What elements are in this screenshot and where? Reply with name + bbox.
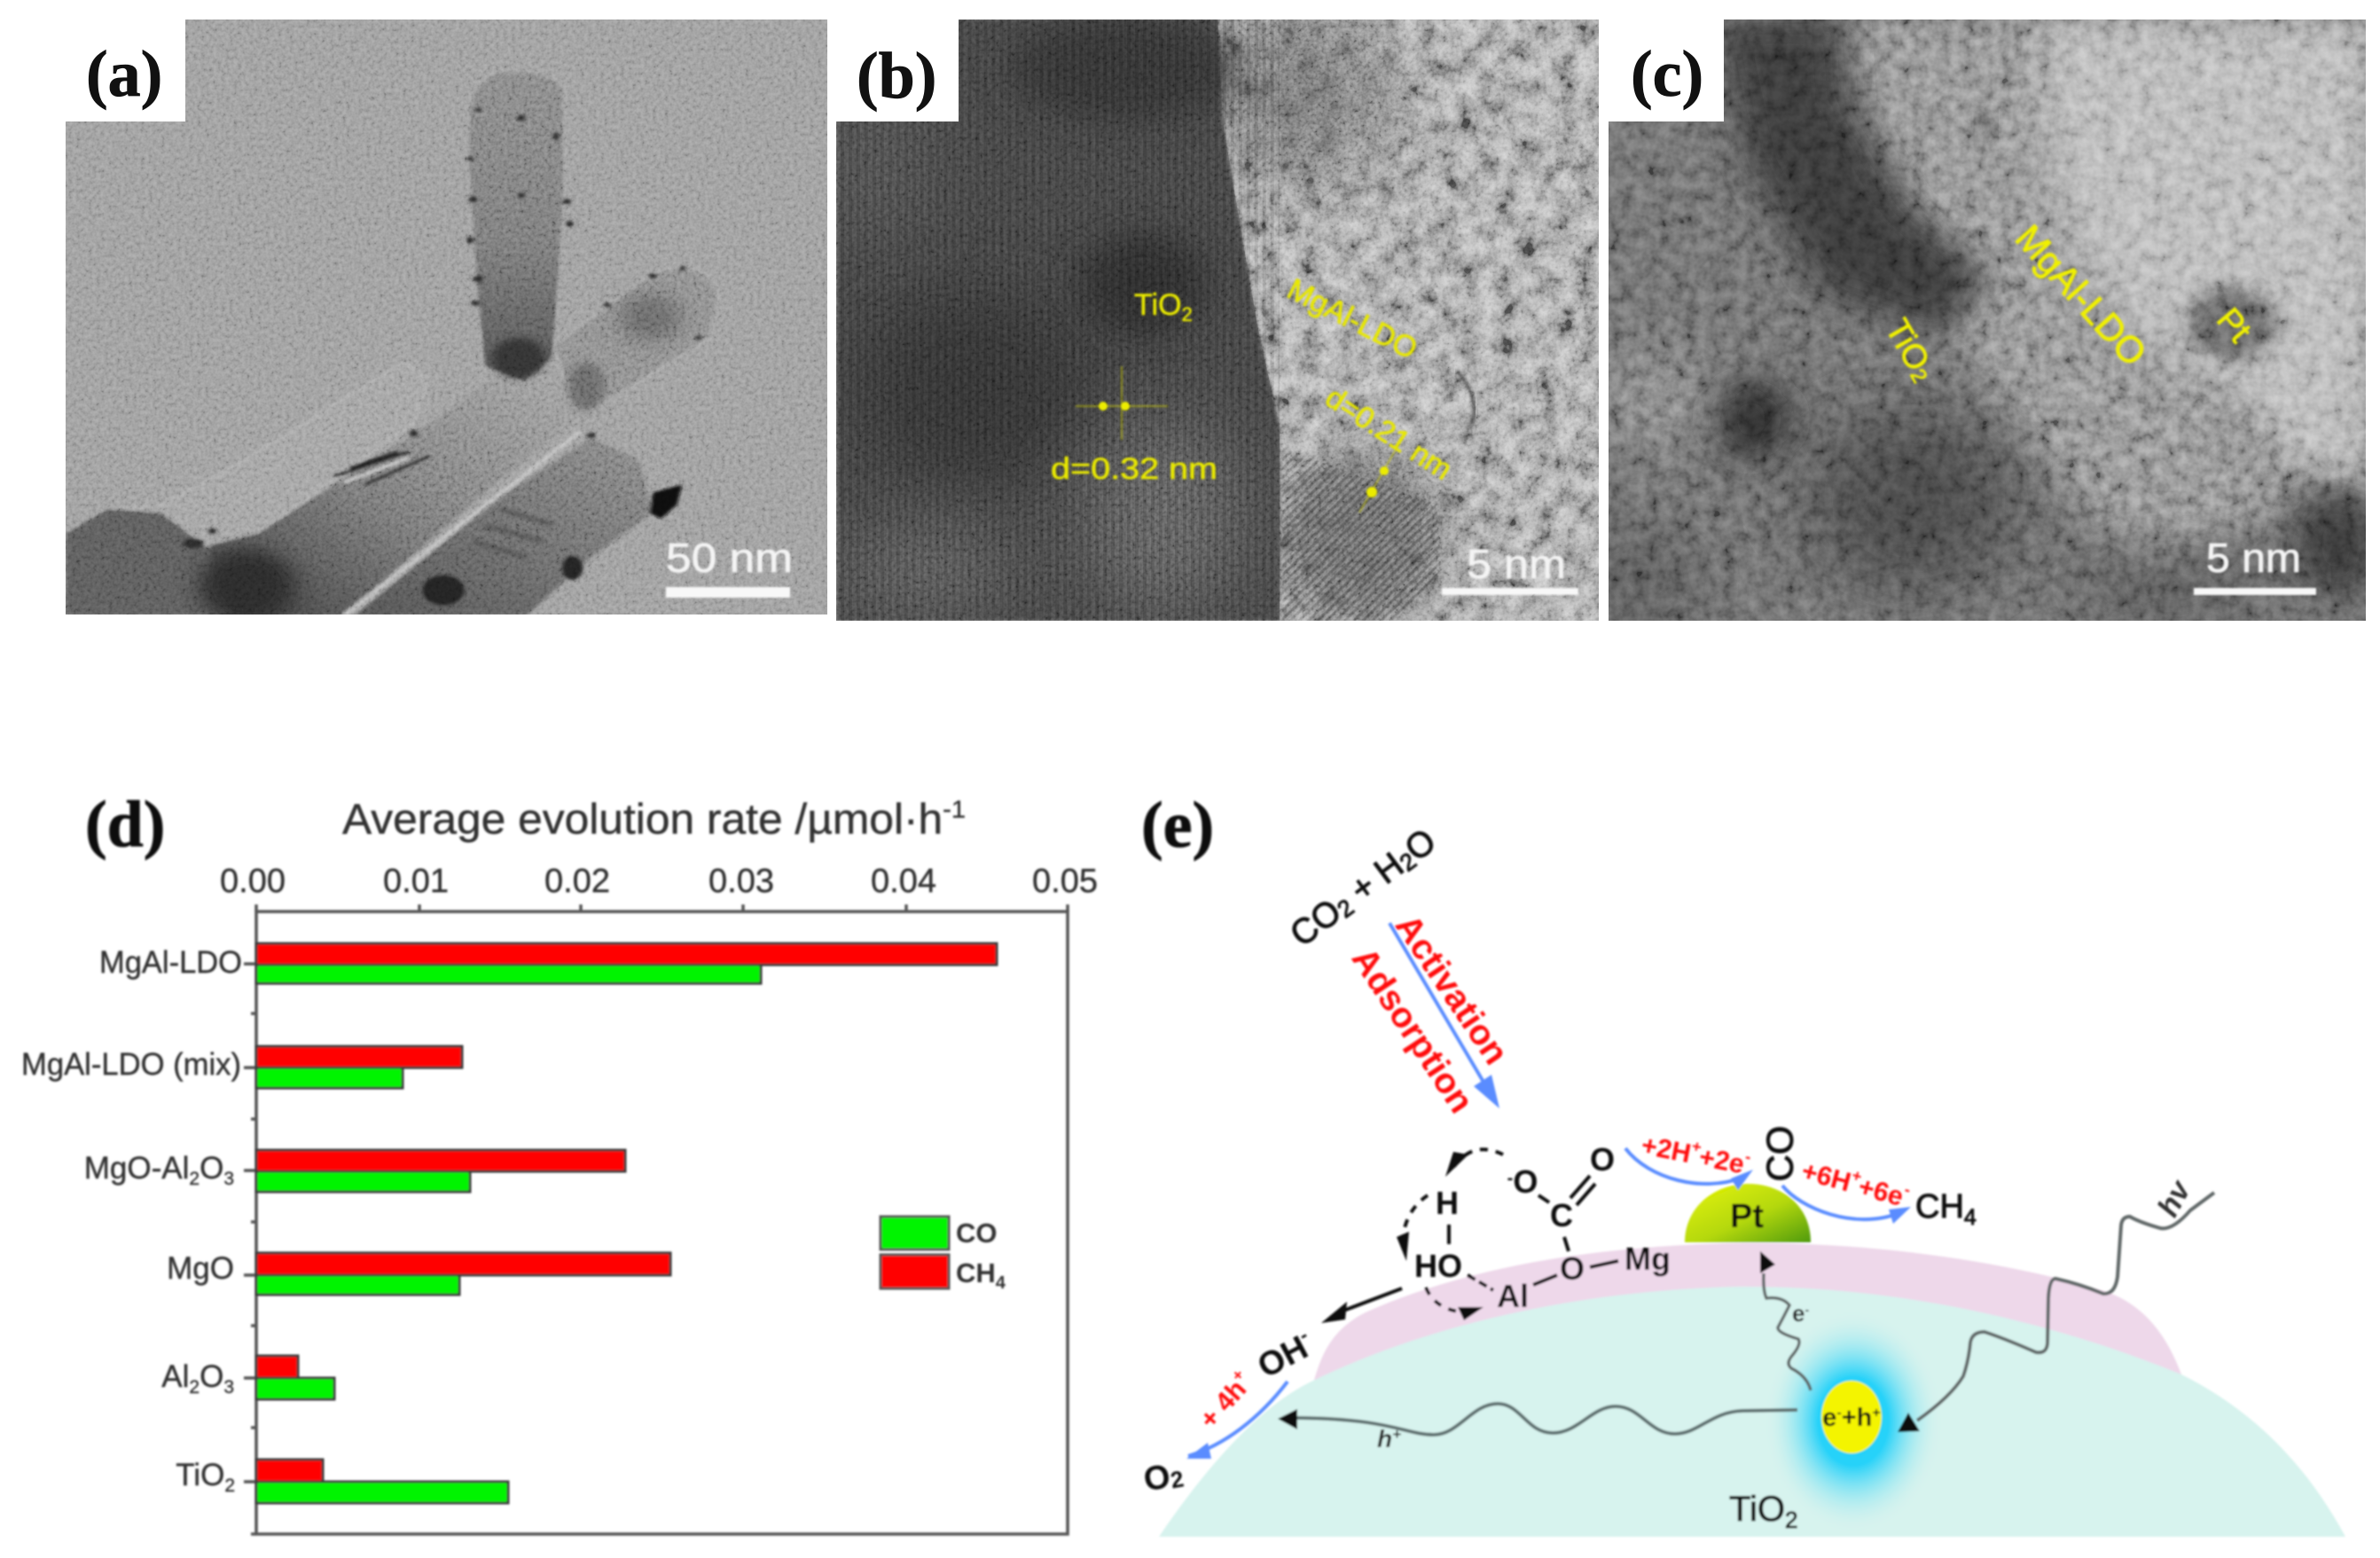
y axis category labels xyxy=(21,945,242,1496)
red label +2H+ +2e-: - xyxy=(1744,1147,1752,1166)
red label +2H+ +2e-: + xyxy=(1690,1137,1703,1156)
red label +6H+ +6e-: + xyxy=(1850,1166,1864,1186)
series: CH4 bars xyxy=(256,943,997,1482)
TiO2 teal body xyxy=(1159,1287,2345,1537)
blue arrow: CO2 to CO xyxy=(1625,1148,1753,1190)
OH- label: OH xyxy=(1252,1329,1314,1386)
wavy arrow: hole: h xyxy=(1377,1425,1392,1452)
yellow annotations: d=0.32 nm xyxy=(1051,452,1217,486)
surface chemistry structure: Mg xyxy=(1625,1241,1671,1277)
reactants text CO2 + H2O: 2 xyxy=(1333,894,1358,923)
red label +6H+ +6e-: +6e xyxy=(1855,1171,1906,1211)
arrow: hydroxyl release xyxy=(1321,1288,1402,1323)
y axis category labels: MgAl-LDO (mix) xyxy=(21,1047,241,1082)
axis title: Average evolution rate /µmol·h xyxy=(342,796,922,843)
surface chemistry structure: C xyxy=(1550,1197,1573,1233)
x axis tick labels: 0.05 xyxy=(1032,863,1098,900)
electron-hole pair: +h xyxy=(1842,1404,1872,1432)
panel: (a) TEM image of nanorods xyxy=(66,20,827,622)
yellow annotations: MgAl-LDO xyxy=(1282,272,1422,366)
label (d): (d) xyxy=(85,788,165,861)
legend: 4 xyxy=(996,1273,1006,1293)
panel: (e) reaction mechanism schematic xyxy=(1141,789,2345,1537)
label (b): (b) xyxy=(857,40,936,113)
plot frame and ticks xyxy=(244,904,1068,1534)
y axis category labels: Al xyxy=(161,1359,189,1394)
y axis category labels: 3 xyxy=(223,1377,234,1398)
legend: CO xyxy=(956,1217,997,1249)
electron-hole pair: e xyxy=(1822,1404,1836,1432)
red label +2H+ +2e-: +2H xyxy=(1639,1131,1693,1169)
Pt particle: Pt xyxy=(1730,1198,1764,1235)
scale bar 5 nm: 5 nm xyxy=(1467,541,1566,587)
scale bar 5 nm xyxy=(1442,541,1578,595)
electron-hole pair xyxy=(1821,1381,1882,1453)
surface chemistry structure: HO xyxy=(1414,1248,1462,1284)
O2 label: O xyxy=(1141,1458,1173,1499)
surface chemistry structure xyxy=(1397,1141,1671,1320)
red label +2H+ +2e-: +2e xyxy=(1697,1142,1747,1179)
yellow annotations: 2 xyxy=(1906,364,1932,387)
y axis category labels: 3 xyxy=(223,1169,234,1189)
white label box (c) xyxy=(1609,20,1724,121)
scale bar 5 nm xyxy=(2194,535,2316,595)
surface chemistry structure: H xyxy=(1436,1185,1459,1221)
x axis tick labels: 0.00 xyxy=(220,863,286,900)
wavy arrow: hole: + xyxy=(1392,1426,1401,1443)
x axis tick labels: 0.03 xyxy=(709,863,774,900)
blue arrow: CO to CH4 xyxy=(1782,1186,1911,1224)
panel: (c) HRTEM with Pt particle xyxy=(1586,20,2380,627)
y axis category labels: O xyxy=(200,1359,223,1394)
scale bar 50 nm xyxy=(666,535,793,598)
red label Activation: Activation xyxy=(1388,908,1515,1071)
surface chemistry structure: - xyxy=(1507,1169,1513,1188)
surface chemistry structure: O xyxy=(1590,1141,1615,1178)
x axis tick labels: 0.04 xyxy=(871,863,936,900)
label (a): (a) xyxy=(86,38,162,111)
electron-hole pair: + xyxy=(1872,1405,1881,1421)
label (e): (e) xyxy=(1141,789,1214,862)
legend: CH xyxy=(956,1257,996,1288)
surface chemistry structure: O xyxy=(1513,1163,1538,1200)
red label Adsorption: Adsorption xyxy=(1344,941,1481,1120)
yellow annotations: 2 xyxy=(1182,303,1193,325)
y axis category labels: 2 xyxy=(189,1169,200,1189)
OH- label: - xyxy=(1295,1323,1311,1346)
red label +6H+ +6e-: +6H xyxy=(1798,1156,1854,1197)
white label box (b) xyxy=(836,20,959,121)
reactants text CO2 + H2O: + H xyxy=(1335,845,1411,915)
yellow annotations: TiO xyxy=(1878,313,1937,378)
CO label: CO xyxy=(1759,1126,1800,1181)
label (c): (c) xyxy=(1631,38,1703,111)
surface chemistry structure: Al xyxy=(1497,1278,1529,1314)
blue arrow: adsorption and activation xyxy=(1390,923,1499,1108)
y axis category labels: MgAl-LDO xyxy=(99,945,242,980)
axis title: -1 xyxy=(943,795,966,823)
reactants text CO2 + H2O: CO xyxy=(1283,891,1349,954)
red label +4h+: + 4h xyxy=(1194,1374,1252,1435)
wavy arrow: electron xyxy=(1760,1251,1811,1390)
x axis tick labels xyxy=(220,863,1098,900)
y axis category labels: 2 xyxy=(224,1476,235,1496)
exciton glow xyxy=(1765,1311,1942,1532)
y axis category labels: MgO xyxy=(167,1251,234,1286)
TiO2 label: 2 xyxy=(1785,1507,1797,1533)
reactants text CO2 + H2O: 2 xyxy=(1395,848,1421,877)
white label box (a) xyxy=(66,20,185,121)
surface chemistry structure: O xyxy=(1560,1250,1585,1287)
wavy arrow: incident light hv xyxy=(1898,1174,2214,1432)
CH4 label: CH xyxy=(1915,1188,1964,1225)
y axis category labels: 2 xyxy=(189,1377,200,1398)
scale bar 5 nm: 5 nm xyxy=(2206,535,2301,581)
MgAl-LDO pink layer xyxy=(1314,1243,2181,1419)
TiO2 label: TiO xyxy=(1729,1490,1785,1529)
series: CO bars xyxy=(256,965,761,1503)
x axis tick labels: 0.02 xyxy=(544,863,610,900)
scale bar 50 nm: 50 nm xyxy=(666,535,793,581)
O2 label: 2 xyxy=(1169,1465,1186,1493)
yellow annotations xyxy=(1878,216,2259,388)
y axis category labels: TiO xyxy=(176,1458,224,1492)
wavy arrow: electron: e xyxy=(1792,1300,1805,1327)
wavy arrow: electron: - xyxy=(1805,1303,1809,1317)
yellow annotations: Pt xyxy=(2209,301,2259,350)
blue arrow to O2 xyxy=(1186,1382,1288,1459)
reactants text CO2 + H2O: O xyxy=(1398,821,1443,869)
y axis category labels: MgO-Al xyxy=(84,1151,189,1186)
CH4 label: 4 xyxy=(1964,1205,1977,1230)
yellow annotations: TiO xyxy=(1134,288,1182,322)
wavy arrow: hole xyxy=(1278,1404,1797,1452)
panel: (b) HRTEM lattice image xyxy=(830,0,1599,627)
Pt particle xyxy=(1685,1184,1811,1242)
x axis tick labels: 0.01 xyxy=(383,863,449,900)
yellow annotations xyxy=(1051,272,1458,513)
yellow annotations: MgAl-LDO xyxy=(2008,216,2155,374)
wavy arrow: incident light hv: hv xyxy=(2151,1174,2198,1222)
y axis category labels: O xyxy=(200,1151,223,1186)
red label +6H+ +6e-: - xyxy=(1903,1180,1913,1199)
panel: (d) bar chart of evolution rates xyxy=(21,788,1098,1534)
yellow annotations: d=0.21 nm xyxy=(1319,380,1458,487)
red label +4h+: + xyxy=(1228,1366,1248,1384)
electron-hole pair: - xyxy=(1836,1405,1842,1421)
legend xyxy=(881,1217,1006,1293)
